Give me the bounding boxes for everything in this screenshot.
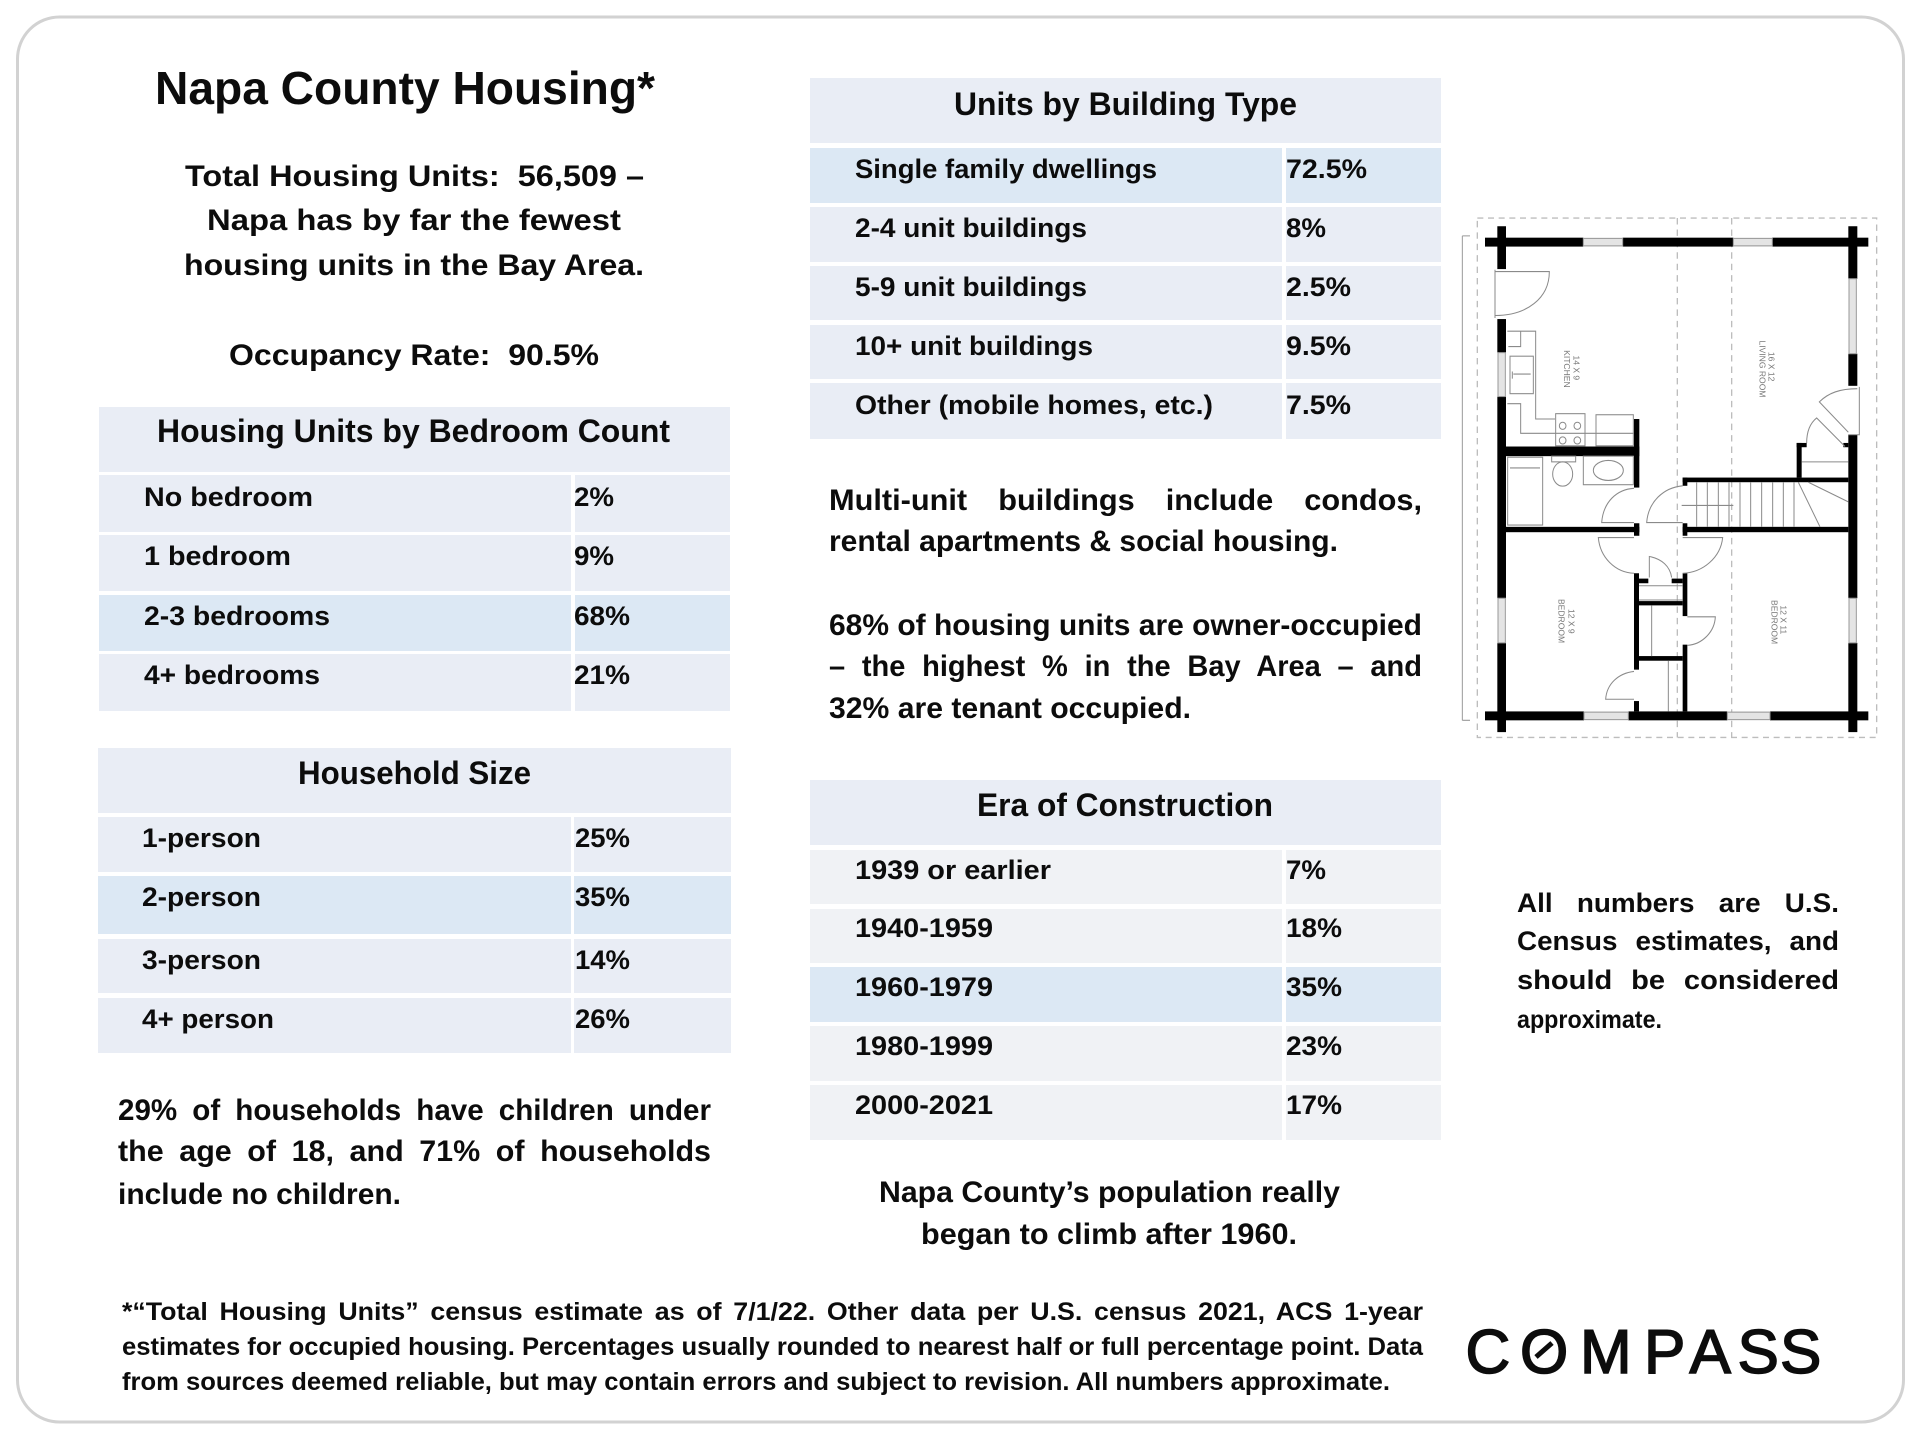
- row: 1939 or earlier: 1939 or earlier: [855, 855, 1052, 885]
- row: 1-person: 25%: [575, 823, 630, 853]
- heading: building type: Units by Building Type: [954, 86, 1297, 122]
- text block: occupancy rate: Occupancy Rate: 90.5%: [229, 339, 599, 372]
- floor plan room labels: BEDROOM: [1770, 600, 1778, 644]
- row: 1 bedroom: 1 bedroom: [144, 541, 291, 571]
- text block: multi-unit buildings: rental apartments & social housing.: [829, 525, 1338, 558]
- row: 1940-1959: 18%: [1286, 913, 1342, 943]
- row: 4+ bedrooms: [99, 654, 730, 711]
- text block: households with children: the age of 18, and 71% of households: [118, 1135, 711, 1168]
- floor plan room labels: 12 X 9: [1566, 609, 1575, 634]
- text block: census note: approximate.: [1517, 1006, 1662, 1034]
- row: 1980-1999: [810, 1026, 1441, 1081]
- heading: household size: Household Size: [298, 755, 531, 791]
- row: 1960-1979: 1960-1979: [855, 972, 993, 1002]
- heading: building type: [810, 78, 1441, 143]
- row: 2-person: [98, 876, 731, 934]
- row: 1940-1959: 1940-1959: [855, 913, 993, 943]
- row: no bedroom: 2%: [574, 482, 614, 512]
- text block: owner occupied: [829, 609, 1422, 725]
- row: 1980-1999: 1980-1999: [855, 1031, 993, 1061]
- row: 2000-2021: 17%: [1286, 1090, 1342, 1120]
- heading: bedroom count: [99, 407, 730, 472]
- row: 4+ person: 4+ person: [142, 1004, 274, 1034]
- row: other: Other (mobile homes, etc.): [855, 390, 1213, 420]
- row: 2-3 bedrooms: [99, 595, 730, 651]
- text block: total housing units: [184, 160, 644, 282]
- text block: owner occupied: 68% of housing units are owner-occupied: [829, 609, 1422, 642]
- row: 5-9 unit buildings: 2.5%: [1286, 272, 1351, 302]
- row: 4+ person: 26%: [575, 1004, 630, 1034]
- row: 10+ unit buildings: [810, 325, 1441, 379]
- row: 2-person: 35%: [575, 882, 630, 912]
- row: 1960-1979: [810, 967, 1441, 1022]
- text block: households with children: 29% of households have children under: [118, 1094, 711, 1127]
- row: 2-3 bedrooms: 68%: [574, 601, 630, 631]
- row: 2-4 unit buildings: 8%: [1286, 213, 1326, 243]
- row: 1 bedroom: [99, 535, 730, 591]
- text block: population climb: Napa County’s population really: [879, 1176, 1340, 1209]
- floor plan doors and fixtures: [1495, 270, 1859, 711]
- row: single family dwellings: [810, 148, 1441, 203]
- panel: era of construction: [810, 780, 1441, 1140]
- floor plan room labels: KITCHEN: [1562, 350, 1571, 388]
- text block: census note: should be considered: [1517, 965, 1839, 995]
- row: no bedroom: No bedroom: [144, 482, 313, 512]
- row: 10+ unit buildings: 9.5%: [1286, 331, 1351, 361]
- logo: Compass: COMPASS: [1466, 1318, 1821, 1387]
- text block: multi-unit buildings: [829, 484, 1422, 558]
- row: 1940-1959: [810, 909, 1441, 963]
- panel: units by building type: [810, 78, 1441, 439]
- floor plan room labels: [1556, 340, 1787, 644]
- row: single family dwellings: Single family dwellings: [855, 154, 1157, 184]
- row: 2-4 unit buildings: 2-4 unit buildings: [855, 213, 1087, 243]
- text block: census note: All numbers are U.S.: [1517, 888, 1839, 918]
- title: Napa County Housing*: [155, 62, 655, 114]
- row: 3-person: [98, 939, 731, 993]
- heading: bedroom count: Housing Units by Bedroom Count: [157, 413, 670, 449]
- text block: households with children: [118, 1094, 711, 1211]
- row: 4+ person: [98, 998, 731, 1053]
- row: 4+ bedrooms: 4+ bedrooms: [144, 660, 320, 690]
- row: 1960-1979: 35%: [1286, 972, 1342, 1002]
- text block: total housing units: housing units in the Bay Area.: [184, 249, 644, 282]
- row: 2000-2021: 2000-2021: [855, 1090, 993, 1120]
- text block: total housing units: Napa has by far the fewest: [207, 204, 621, 237]
- row: 3-person: 14%: [575, 945, 630, 975]
- heading: era of construction: [810, 780, 1441, 845]
- row: 5-9 unit buildings: [810, 266, 1441, 320]
- footnote: [122, 1298, 1424, 1396]
- floor plan room labels: BEDROOM: [1556, 599, 1565, 643]
- row: no bedroom: [99, 475, 730, 532]
- text block: owner occupied: 32% are tenant occupied.: [829, 692, 1191, 725]
- text block: population climb: [879, 1176, 1340, 1251]
- heading: era of construction: Era of Construction: [977, 787, 1273, 823]
- row: 2000-2021: [810, 1085, 1441, 1140]
- heading: household size: [98, 748, 731, 813]
- row: 3-person: 3-person: [142, 945, 261, 975]
- footnote: *“Total Housing Units” census estimate as of 7/1/22. Other data per U.S. census 2021, ACS 1-year: [122, 1298, 1423, 1326]
- row: 4+ bedrooms: 21%: [574, 660, 630, 690]
- text block: census note: [1517, 888, 1839, 1034]
- row: 1-person: [98, 817, 731, 872]
- panel: household size: [98, 748, 731, 1053]
- row: 2-4 unit buildings: [810, 207, 1441, 262]
- row: 1939 or earlier: [810, 850, 1441, 904]
- row: other: [810, 383, 1441, 439]
- floor plan room labels: LIVING ROOM: [1757, 340, 1766, 398]
- floor plan walls: [1485, 226, 1868, 732]
- floor plan room labels: 16 X 12: [1766, 352, 1775, 382]
- row: 1-person: 1-person: [142, 823, 261, 853]
- text block: total housing units: Total Housing Units: 56,509 –: [185, 160, 644, 193]
- icon: floor plan: [1462, 218, 1877, 737]
- row: 1 bedroom: 9%: [574, 541, 614, 571]
- text block: population climb: began to climb after 1960.: [921, 1218, 1297, 1251]
- row: 2-3 bedrooms: 2-3 bedrooms: [144, 601, 330, 631]
- row: 1980-1999: 23%: [1286, 1031, 1342, 1061]
- row: other: 7.5%: [1286, 390, 1351, 420]
- text block: multi-unit buildings: Multi-unit buildings include condos,: [829, 484, 1422, 517]
- footnote: from sources deemed reliable, but may contain errors and subject to revision. All numbers approximate.: [122, 1368, 1390, 1396]
- floor plan windows: [1498, 238, 1856, 720]
- row: single family dwellings: 72.5%: [1286, 154, 1367, 184]
- row: 10+ unit buildings: 10+ unit buildings: [855, 331, 1093, 361]
- row: 5-9 unit buildings: 5-9 unit buildings: [855, 272, 1087, 302]
- text block: census note: Census estimates, and: [1517, 926, 1839, 956]
- row: 2-person: 2-person: [142, 882, 261, 912]
- text block: owner occupied: – the highest % in the Bay Area – and: [829, 650, 1422, 683]
- floor plan room labels: 12 X 11: [1779, 605, 1787, 635]
- floor plan room labels: 14 X 9: [1571, 355, 1580, 381]
- text block: households with children: include no children.: [118, 1178, 401, 1211]
- row: 1939 or earlier: 7%: [1286, 855, 1326, 885]
- panel: housing units by bedroom count: [99, 407, 730, 711]
- footnote: estimates for occupied housing. Percentages usually rounded to nearest half or full percentage point. Data: [122, 1333, 1424, 1361]
